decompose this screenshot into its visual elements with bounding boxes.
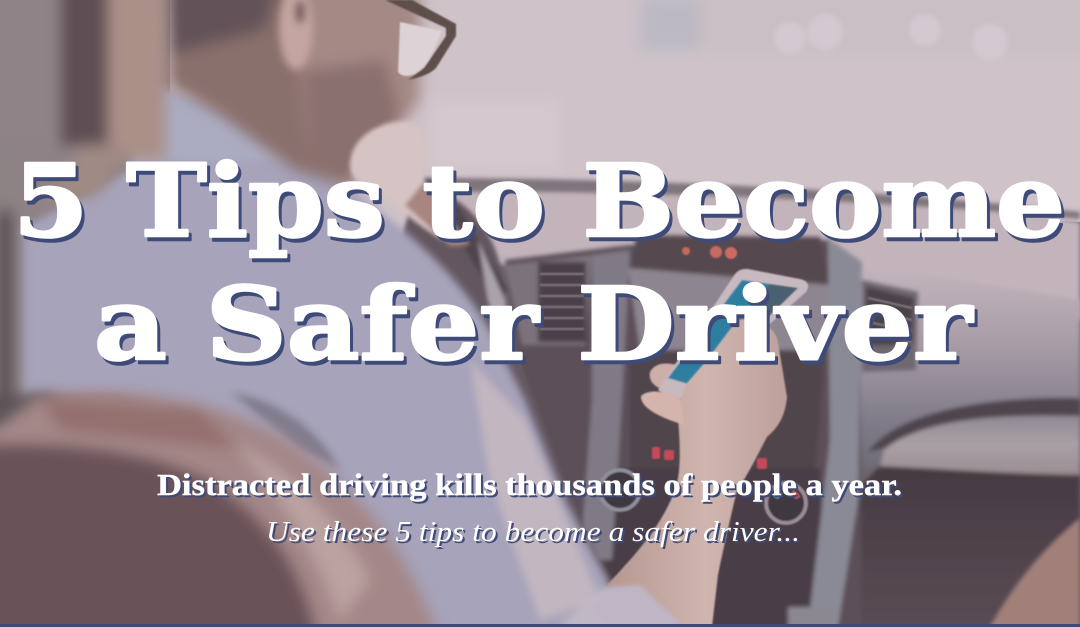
passenger arm: [988, 518, 1080, 627]
window / sky: [0, 0, 1080, 440]
title: [13, 142, 1068, 387]
console lights and dials: [600, 246, 806, 523]
glasses: [385, 0, 456, 80]
finger behind phone: [650, 364, 680, 392]
phone: [658, 269, 808, 399]
bottom border line: [0, 624, 1080, 627]
right dash panel: [835, 262, 1080, 627]
title line 2: a Safer Driver: [97, 269, 976, 387]
title line 1: 5 Tips to Become: [13, 142, 1065, 260]
subtitle: distracted driving: Distracted driving kills thousands of people a year.: [157, 467, 902, 502]
headrest and pillar: [0, 0, 166, 435]
subtitle: distracted driving: Distracted driving kills thousands of people a year.: [159, 469, 904, 504]
hand on steering wheel: [350, 121, 470, 246]
driver shirt and body: [20, 85, 690, 627]
driver ear: [279, 0, 313, 70]
subtitle: use these tips: Use these 5 tips to become a safer driver...: [268, 518, 802, 550]
steering wheel: [400, 178, 610, 600]
shirt cuff: [590, 585, 683, 627]
driver hair and neck: [166, 0, 420, 190]
driver arm and hand holding phone: [607, 319, 787, 627]
title line 2: a Safer Driver: [94, 265, 973, 383]
vent slats: [540, 274, 912, 342]
seat back: [0, 391, 440, 627]
centre console: [505, 235, 918, 627]
dashboard base: [420, 178, 1080, 627]
title line 1: 5 Tips to Become: [16, 146, 1068, 264]
subtitle: use these tips: Use these 5 tips to become a safer driver...: [266, 516, 800, 548]
